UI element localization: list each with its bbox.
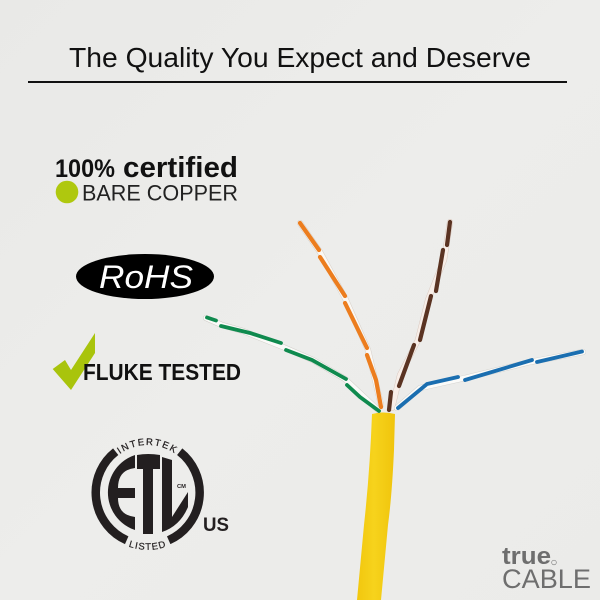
- logo: trueCABLE: CABLE: [502, 564, 591, 594]
- wire: green pair: [206, 318, 379, 411]
- badge: ETL listed: INTERTEK: [116, 438, 178, 454]
- badge: Fluke tested: FLUKE TESTED: [83, 359, 241, 385]
- badge: ETL listed: LISTED: [129, 540, 165, 550]
- badge: Fluke tested: [53, 333, 241, 390]
- badge: ETL listed: CM: [177, 484, 186, 490]
- badge: RoHS: [76, 254, 214, 299]
- title: The Quality You Expect and Deserve: [69, 42, 531, 73]
- badge: ETL listed: US: [203, 515, 229, 536]
- badge: ETL listed: [92, 438, 229, 550]
- cable: yellow jacket: [357, 412, 395, 600]
- badge: RoHS: RoHS: [99, 259, 193, 295]
- badge: 100% certified bare copper: 100%: [55, 155, 115, 183]
- logo: trueCABLE: [502, 543, 591, 594]
- badge: 100% certified bare copper: [55, 152, 238, 206]
- logo: trueCABLE: true: [502, 543, 551, 570]
- wire: brown pair: [389, 222, 450, 410]
- badge: 100% certified bare copper: certified: [123, 152, 238, 184]
- wire: orange pair: [300, 223, 381, 407]
- badge: 100% certified bare copper: BARE COPPER: [82, 180, 238, 206]
- wire: blue pair: [397, 352, 583, 408]
